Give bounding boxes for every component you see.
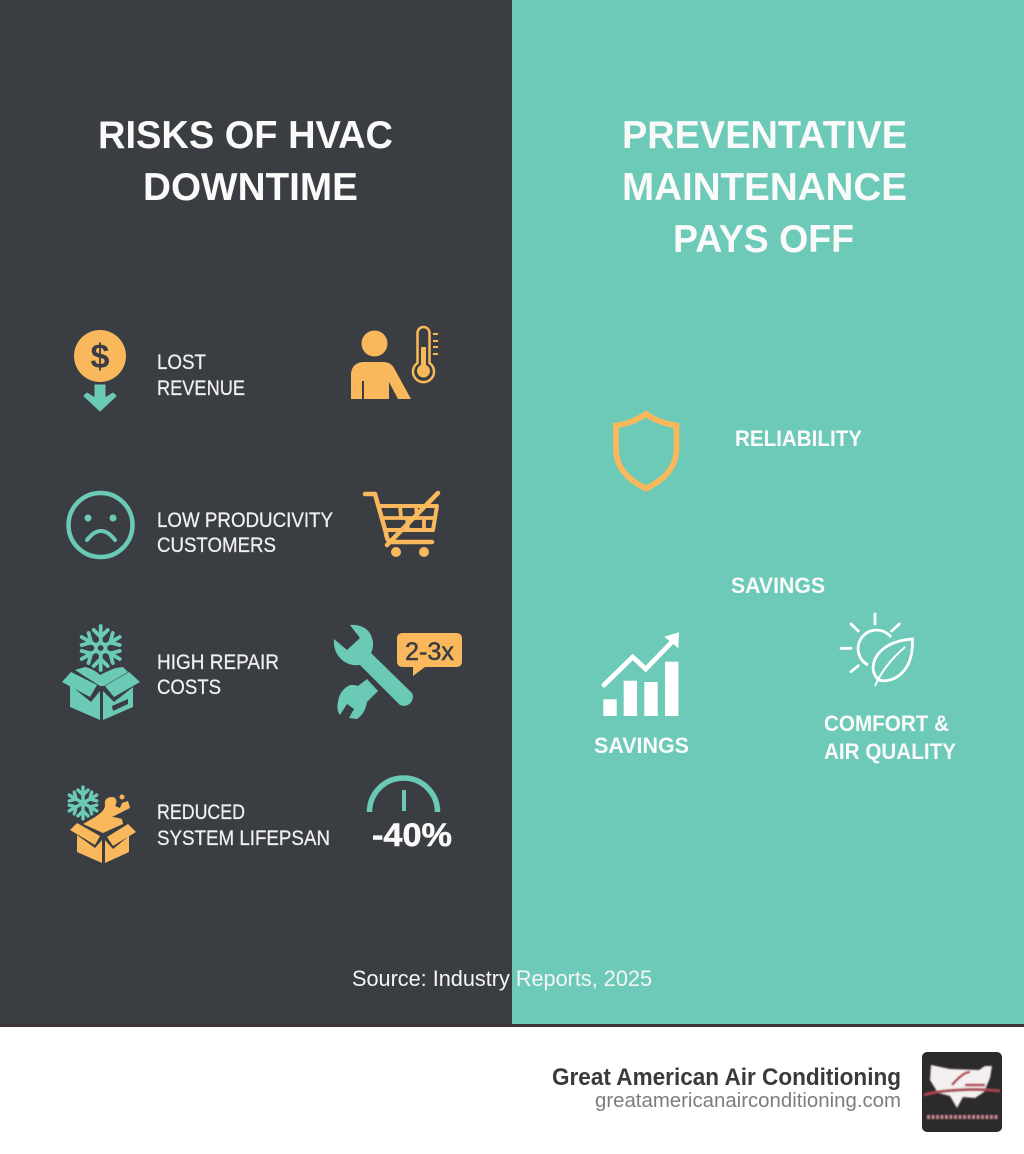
icon: falling dollar coin bbox=[74, 330, 126, 411]
text: reduced system lifespan: SYSTEM LIFEPSAN bbox=[157, 827, 330, 850]
icon: falling dollar coin: $ bbox=[91, 338, 110, 376]
icon: shield bbox=[616, 414, 676, 488]
text: high repair costs bbox=[157, 651, 279, 699]
footer website: greatamericanairconditioning.com bbox=[595, 1090, 901, 1112]
text: lost revenue: LOST bbox=[157, 351, 206, 374]
label: comfort and air quality: COMFORT & bbox=[824, 711, 949, 736]
text: high repair costs: COSTS bbox=[157, 676, 221, 699]
callout: 2-3x cost bubble bbox=[397, 633, 462, 676]
icon: sad face bbox=[68, 493, 132, 557]
heading: preventative maintenance pays off: PAYS OFF bbox=[673, 218, 854, 261]
footer brand name: Great American Air Conditioning bbox=[552, 1064, 901, 1091]
heading: preventative maintenance pays off: PREVENTATIVE bbox=[622, 114, 907, 157]
icon: rising bar chart bbox=[603, 632, 679, 716]
text: lost revenue bbox=[157, 351, 245, 400]
label: savings lower: SAVINGS bbox=[594, 733, 689, 758]
panel: risks of HVAC downtime bbox=[0, 0, 512, 1025]
heading: preventative maintenance pays off: MAINTENANCE bbox=[622, 166, 907, 209]
panel: preventative maintenance pays off bbox=[512, 0, 1024, 1024]
icon: crossed out shopping cart bbox=[365, 493, 438, 557]
icon: lifespan gauge bbox=[370, 778, 438, 812]
icon: snowflake with broken box bbox=[67, 787, 136, 863]
label: comfort and air quality bbox=[824, 711, 956, 764]
heading: risks of HVAC downtime: DOWNTIME bbox=[143, 166, 358, 209]
text: low productivity customers: CUSTOMERS bbox=[157, 534, 276, 557]
label: savings upper: SAVINGS bbox=[731, 573, 825, 598]
logo bbox=[922, 1052, 1002, 1132]
icon: crossed wrenches bbox=[334, 625, 413, 719]
text: reduced system lifespan: REDUCED bbox=[157, 801, 245, 824]
label: comfort and air quality: AIR QUALITY bbox=[824, 739, 956, 764]
text: low productivity customers: LOW PRODUCIVITY bbox=[157, 509, 333, 532]
heading: risks of HVAC downtime: RISKS OF HVAC bbox=[98, 114, 393, 157]
text: high repair costs: HIGH REPAIR bbox=[157, 651, 279, 674]
icon: box with snowflake bbox=[62, 626, 140, 720]
heading: risks of HVAC downtime bbox=[98, 114, 393, 209]
source note: Source: Industry Reports, 2025 bbox=[352, 966, 652, 991]
label: reliability: RELIABILITY bbox=[735, 426, 862, 451]
text: low productivity customers bbox=[157, 509, 333, 557]
stat: minus 40 percent: -40% bbox=[372, 817, 452, 853]
text: reduced system lifespan bbox=[157, 801, 330, 850]
icon: sun and leaf bbox=[841, 614, 912, 686]
callout: 2-3x cost bubble: 2-3x bbox=[405, 638, 454, 666]
icon: person with thermometer bbox=[351, 327, 438, 399]
text: lost revenue: REVENUE bbox=[157, 377, 245, 400]
heading: preventative maintenance pays off bbox=[622, 114, 907, 261]
footer band bbox=[0, 1024, 1024, 1154]
